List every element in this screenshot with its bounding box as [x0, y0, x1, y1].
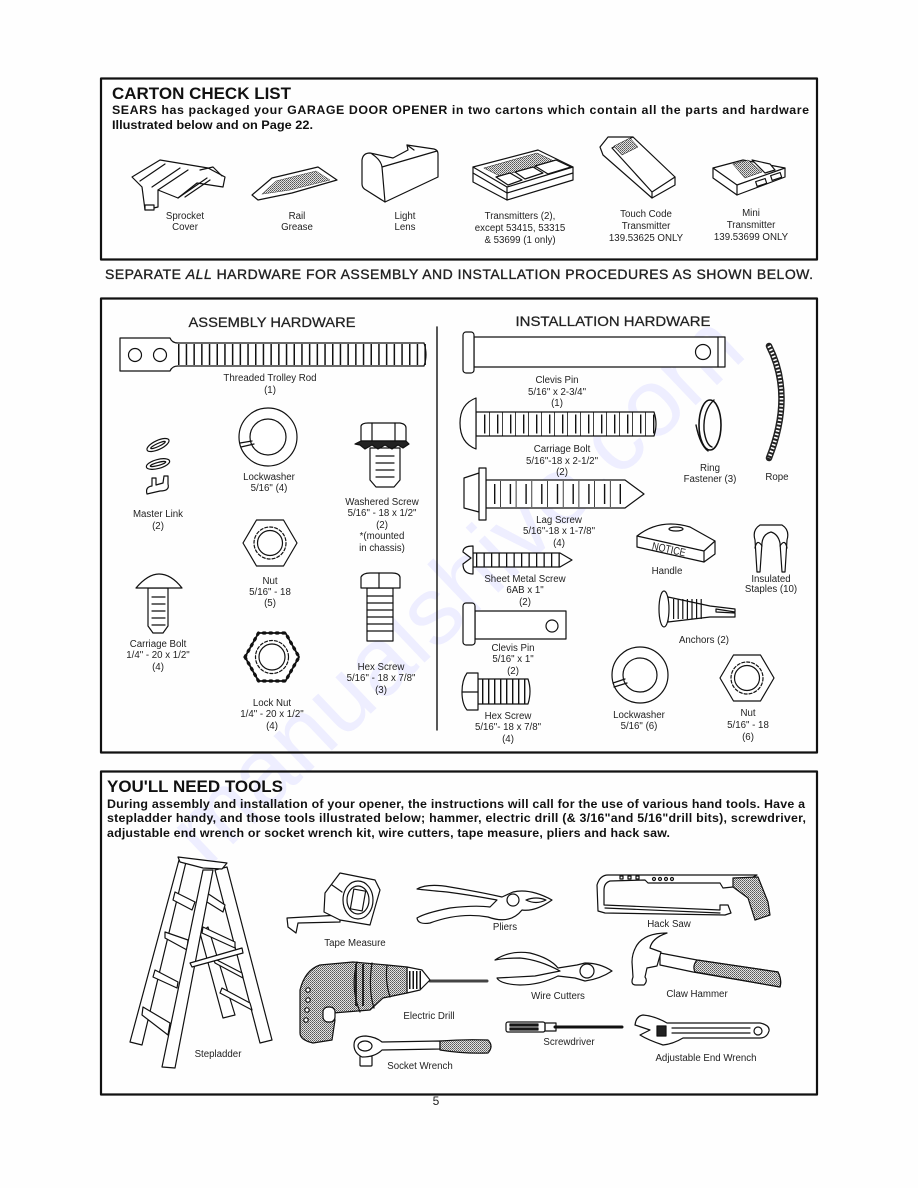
icon: nut: [243, 520, 297, 566]
label: wire cutters: Wire Cutters: [531, 991, 585, 1002]
icon: insulated staples: [754, 525, 788, 572]
heading: assembly hardware: ASSEMBLY HARDWARE: [188, 315, 356, 330]
icon: long carriage bolt: [460, 398, 656, 449]
label: sheet metal screw: 6AB x 1": [506, 585, 544, 596]
label: ring fastener: Fastener (3): [684, 474, 736, 485]
icon: installation lockwasher: [612, 647, 668, 703]
label: nut: Nut: [262, 576, 278, 587]
icon: claw hammer: [632, 933, 781, 987]
text: carton intro: Illustrated below and on Page 22.: [112, 118, 313, 132]
label: long clevis pin: (1): [551, 398, 563, 409]
label: sheet metal screw: (2): [519, 597, 531, 608]
label: socket wrench: Socket Wrench: [387, 1061, 453, 1072]
label: touch code transmitter: 139.53625 ONLY: [609, 233, 684, 244]
icon: sprocket cover: [132, 160, 225, 210]
icon: ring fastener: [696, 400, 721, 451]
label: installation lockwasher: 5/16" (6): [621, 721, 657, 732]
icon: rail grease: [252, 167, 337, 200]
label: transmitters: except 53415, 53315: [475, 223, 565, 234]
icon: sheet metal screw: [463, 546, 572, 574]
label: short clevis pin: Clevis Pin: [491, 643, 535, 654]
icon: master link: [145, 436, 171, 494]
icon: lag screw: [464, 468, 644, 520]
panel: you'll need tools: [101, 772, 817, 1094]
label: short clevis pin: (2): [507, 666, 519, 677]
label: insulated staples: Insulated: [751, 574, 791, 585]
heading: separate all hardware: SEPARATE ALL HARDWARE FOR ASSEMBLY AND INSTALLATION PROCEDURES AS SHOWN BELOW.: [105, 266, 813, 282]
label: long carriage bolt: 5/16"-18 x 2-1/2": [526, 456, 599, 467]
icon: handle: NOTICE: [651, 541, 687, 559]
label: sheet metal screw: Sheet Metal Screw: [484, 574, 567, 585]
icon: socket wrench: [354, 1036, 491, 1066]
panel: carton check list: [101, 78, 817, 260]
icon: installation nut: [720, 655, 774, 701]
label: lock nut: (4): [266, 721, 278, 732]
heading: you'll need tools: YOU'LL NEED TOOLS: [107, 777, 283, 796]
label: installation hex screw: 5/16"- 18 x 7/8": [475, 722, 542, 733]
label: installation hex screw: (4): [502, 734, 514, 745]
label: lockwasher: 5/16" (4): [251, 483, 287, 494]
label: stepladder: Stepladder: [195, 1049, 242, 1060]
label: washered screw: Washered Screw: [345, 497, 420, 508]
label: long carriage bolt: (2): [556, 467, 568, 478]
label: washered screw: in chassis): [359, 543, 405, 554]
label: tape measure: Tape Measure: [324, 938, 386, 949]
text: manualshive.com: [148, 292, 763, 884]
icon: carriage bolt: [136, 574, 182, 633]
label: light lens: Light: [394, 211, 416, 222]
label: installation lockwasher: Lockwasher: [613, 710, 666, 721]
label: carriage bolt: 1/4" - 20 x 1/2": [126, 650, 190, 661]
label: screwdriver: Screwdriver: [543, 1037, 595, 1048]
label: installation nut: 5/16" - 18: [727, 720, 769, 731]
label: threaded trolley rod: Threaded Trolley Rod: [223, 373, 317, 384]
label: sprocket cover: Cover: [172, 222, 199, 233]
label: long clevis pin: 5/16" x 2-3/4": [528, 387, 587, 398]
icon: hack saw: [597, 875, 770, 920]
icon: installation hex screw: [462, 673, 530, 710]
label: lag screw: Lag Screw: [536, 515, 583, 526]
text: tools intro: adjustable end wrench or socket wrench kit, wire cutters, tape measure, pliers and hack saw.: [107, 826, 670, 840]
label: lag screw: 5/16"-18 x 1-7/8": [523, 526, 596, 537]
icon: light lens: [362, 145, 438, 202]
icon: transmitter: [473, 150, 573, 200]
label: long clevis pin: Clevis Pin: [535, 375, 579, 386]
label: touch code transmitter: Transmitter: [622, 221, 671, 232]
label: mini transmitter: Mini: [742, 208, 760, 219]
label: hack saw: Hack Saw: [647, 919, 692, 930]
label: insulated staples: Staples (10): [745, 584, 797, 595]
label: short clevis pin: 5/16" x 1": [492, 654, 534, 665]
label: lockwasher: Lockwasher: [243, 472, 296, 483]
icon: hex screw: [361, 573, 400, 641]
label: sprocket cover: Sprocket: [166, 211, 204, 222]
icon: wire cutters: [495, 952, 612, 985]
icon: touch code transmitter: [600, 137, 675, 198]
label: carriage bolt: Carriage Bolt: [130, 639, 187, 650]
label: carriage bolt: (4): [152, 662, 164, 673]
label: handle: Handle: [652, 566, 682, 577]
label: mini transmitter: 139.53699 ONLY: [714, 232, 789, 243]
heading: installation hardware: INSTALLATION HARDWARE: [516, 314, 710, 329]
label: installation nut: Nut: [740, 708, 756, 719]
label: mini transmitter: Transmitter: [727, 220, 776, 231]
label: lag screw: (4): [553, 538, 565, 549]
icon: handle: [637, 524, 715, 562]
icon: pliers: [417, 885, 552, 923]
label: installation hex screw: Hex Screw: [485, 711, 532, 722]
label: adjustable end wrench: Adjustable End Wrench: [655, 1053, 757, 1064]
label: rope: Rope: [765, 472, 789, 483]
page number: 5: [433, 1094, 440, 1108]
heading: carton check list: CARTON CHECK LIST: [112, 84, 291, 103]
text: tools intro: [107, 797, 806, 840]
label: washered screw: 5/16" - 18 x 1/2": [348, 508, 417, 519]
icon: mini transmitter: [713, 160, 785, 195]
text: carton intro: [112, 103, 809, 132]
text: tools intro: During assembly and installation of your opener, the instructions will call for the use of various hand tools. Have a: [107, 797, 805, 811]
label: touch code transmitter: Touch Code: [620, 209, 672, 220]
icon: tape measure: [287, 873, 380, 933]
label: transmitters: Transmitters (2),: [485, 211, 555, 222]
icon: electric drill: [300, 962, 487, 1043]
label: washered screw: (2): [376, 520, 388, 531]
label: rail grease: Rail: [289, 211, 305, 222]
label: washered screw: *(mounted: [360, 531, 404, 542]
label: nut: 5/16" - 18: [249, 587, 291, 598]
icon: screwdriver: [506, 1022, 622, 1032]
label: rail grease: Grease: [281, 222, 313, 233]
label: hex screw: (3): [375, 685, 387, 696]
label: claw hammer: Claw Hammer: [666, 989, 728, 1000]
icon: lock nut: [245, 633, 299, 681]
label: electric drill: Electric Drill: [403, 1011, 455, 1022]
icon: anchors: [659, 591, 735, 627]
icon: threaded trolley rod: [120, 338, 426, 371]
icon: short clevis pin: [463, 603, 566, 645]
icon: rope: [769, 346, 782, 458]
icon: washered screw: [355, 423, 409, 487]
text: carton intro: SEARS has packaged your GARAGE DOOR OPENER in two cartons which contain all the parts and hardware: [112, 103, 809, 117]
label: nut: (5): [264, 598, 276, 609]
label: lock nut: Lock Nut: [253, 698, 291, 709]
label: master link: (2): [152, 521, 164, 532]
label: ring fastener: Ring: [700, 463, 720, 474]
text: tools intro: stepladder handy, and those tools illustrated below; hammer, electric drill (& 3/16"and 5/16"drill bits), screwdriver,: [107, 811, 806, 825]
label: light lens: Lens: [394, 222, 416, 233]
label: long carriage bolt: Carriage Bolt: [534, 444, 591, 455]
icon: adjustable end wrench: [635, 1015, 769, 1045]
icon: stepladder: [130, 857, 272, 1068]
label: lock nut: 1/4" - 20 x 1/2": [240, 709, 304, 720]
icon: long clevis pin: [463, 332, 725, 373]
label: anchors: Anchors (2): [679, 635, 729, 646]
panel: hardware: [101, 298, 817, 752]
label: installation nut: (6): [742, 732, 754, 743]
label: master link: Master Link: [133, 509, 183, 520]
label: threaded trolley rod: (1): [264, 385, 276, 396]
label: hex screw: Hex Screw: [358, 662, 405, 673]
label: hex screw: 5/16" - 18 x 7/8": [347, 673, 416, 684]
icon: lockwasher: [239, 408, 297, 466]
label: transmitters: & 53699 (1 only): [484, 235, 556, 246]
label: pliers: Pliers: [493, 922, 517, 933]
